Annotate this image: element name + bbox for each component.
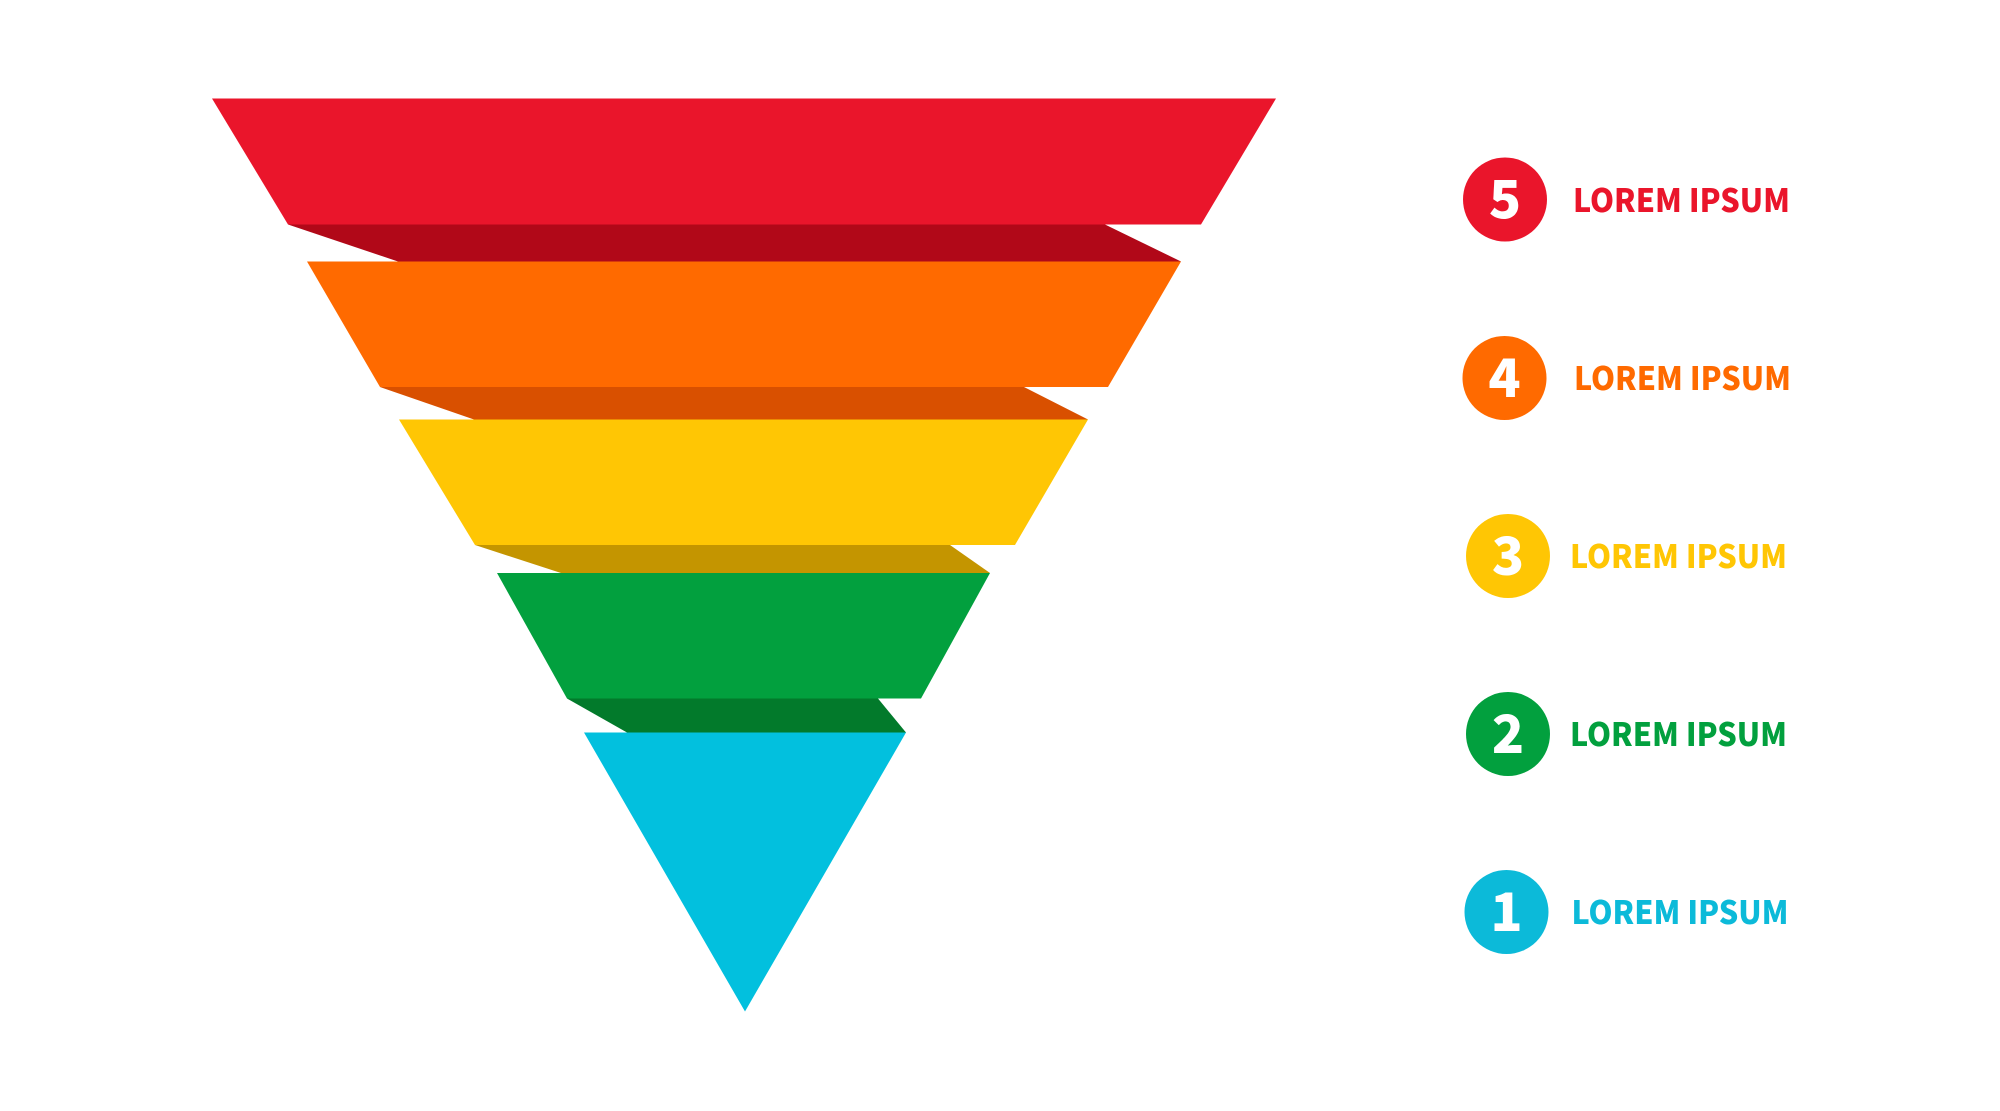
funnel layer 5: red [212, 98, 1276, 224]
badge 4 [1462, 336, 1546, 420]
label 5: LOREM IPSUM [1573, 176, 1790, 222]
legend item 5 [1463, 158, 1790, 242]
badge 3: 3 [1492, 515, 1524, 591]
badge 1 [1464, 870, 1548, 954]
legend item 3 [1466, 514, 1787, 598]
label 3: LOREM IPSUM [1570, 532, 1787, 578]
legend item 1 [1464, 870, 1788, 954]
badge 2 [1466, 692, 1550, 776]
badge 5 [1463, 158, 1547, 242]
funnel layer 4: orange [307, 262, 1181, 387]
funnel layer 2: green [497, 573, 990, 698]
badge 1: 1 [1490, 871, 1523, 947]
label 4: LOREM IPSUM [1574, 354, 1791, 400]
legend item 4 [1462, 336, 1791, 420]
funnel layer 3: yellow [399, 420, 1088, 545]
funnel chart [212, 98, 1276, 1012]
shadow fold: red to orange [288, 224, 1181, 262]
badge 2: 2 [1492, 693, 1524, 769]
label 2: LOREM IPSUM [1570, 710, 1787, 756]
funnel layer 1: blue triangle [584, 732, 906, 1012]
badge 4: 4 [1488, 337, 1521, 413]
label 1: LOREM IPSUM [1572, 888, 1788, 934]
shadow fold: orange to yellow [380, 387, 1088, 420]
shadow fold: yellow to green [475, 545, 990, 573]
badge 3 [1466, 514, 1550, 598]
legend item 2 [1466, 692, 1787, 776]
badge 5: 5 [1489, 158, 1521, 234]
shadow fold: green to blue [567, 698, 906, 732]
